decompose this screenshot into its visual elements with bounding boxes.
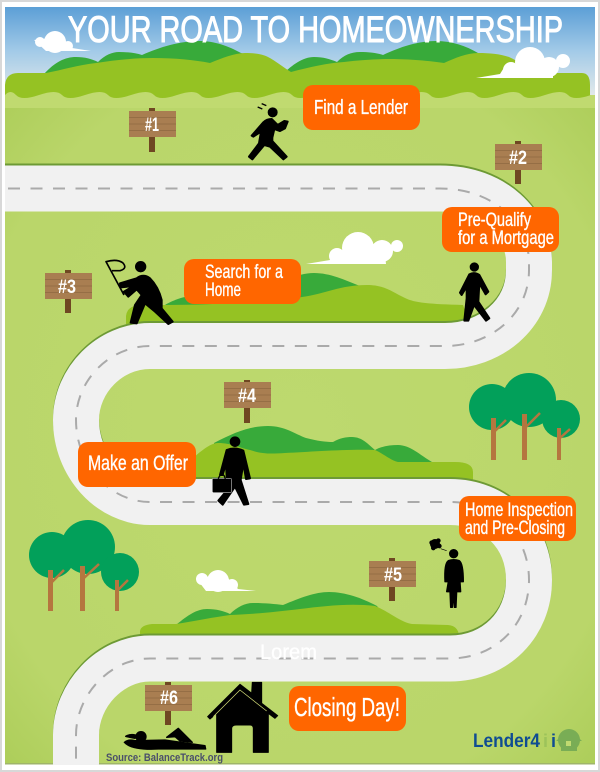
callout: Find a Lender	[303, 85, 420, 130]
callout: Search for a Home: Home	[205, 280, 241, 301]
person: lying down	[124, 728, 206, 749]
road	[5, 186, 529, 765]
hill: behind road section 2	[126, 273, 470, 324]
cloud: top left	[34, 31, 91, 53]
person: with net	[106, 260, 173, 324]
sign: #4	[224, 380, 271, 423]
callout: Find a Lender: Find a Lender	[314, 97, 408, 119]
cloud: top right	[476, 47, 570, 78]
sign: #2: #2	[509, 148, 527, 169]
callout: Pre-Qualify for a Mortgage	[442, 207, 559, 252]
logo: Lender4: i	[543, 731, 548, 751]
callout: Closing Day	[289, 686, 406, 731]
cloud: lower	[196, 570, 256, 592]
sign: #3: #3	[58, 277, 76, 298]
person: with briefcase	[212, 437, 250, 505]
person: walking	[460, 263, 489, 321]
sign: #4: #4	[238, 386, 256, 407]
sign: #5: #5	[384, 565, 402, 586]
sign: #6: #6	[160, 688, 178, 709]
scalloped field edge	[5, 92, 595, 108]
source credit: Source: BalanceTrack.org	[106, 752, 223, 764]
hills: top background	[44, 41, 478, 80]
callout: Search for a Home	[184, 259, 301, 304]
trees: right	[469, 373, 580, 460]
callout: Pre-Qualify for a Mortgage: Pre-Qualify	[458, 210, 531, 231]
logo: Lender4	[473, 729, 582, 752]
sign: #1: #1	[145, 115, 159, 136]
hills: top foreground band	[5, 53, 590, 100]
callout: Closing Day: Closing Day!	[294, 692, 400, 722]
sign: #6	[145, 682, 192, 725]
road label: Lorem	[260, 641, 317, 664]
cloud: middle	[306, 232, 403, 264]
hill: behind road section 4	[140, 592, 459, 637]
callout: Make an Offer: Make an Offer	[88, 452, 188, 475]
callout: Home Inspection and Pre-Closing: and Pre-Closing	[465, 518, 565, 539]
person: worrying	[430, 539, 463, 607]
sign: #3	[45, 270, 92, 313]
hill: behind road section 3	[192, 426, 473, 482]
callout: Make an Offer	[78, 442, 196, 487]
callout: Pre-Qualify for a Mortgage: for a Mortgage	[458, 228, 554, 249]
sign: #5	[369, 558, 416, 601]
callout: Search for a Home: Search for a	[205, 262, 283, 283]
sign: #1	[129, 108, 176, 152]
person: running	[249, 104, 288, 159]
icon: house	[208, 682, 278, 752]
sign: #2	[495, 141, 542, 184]
logo: Lender4: i	[551, 731, 556, 751]
callout: Home Inspection and Pre-Closing	[459, 496, 576, 541]
logo: Lender4: Lender4	[473, 731, 540, 752]
trees: left	[29, 520, 139, 611]
